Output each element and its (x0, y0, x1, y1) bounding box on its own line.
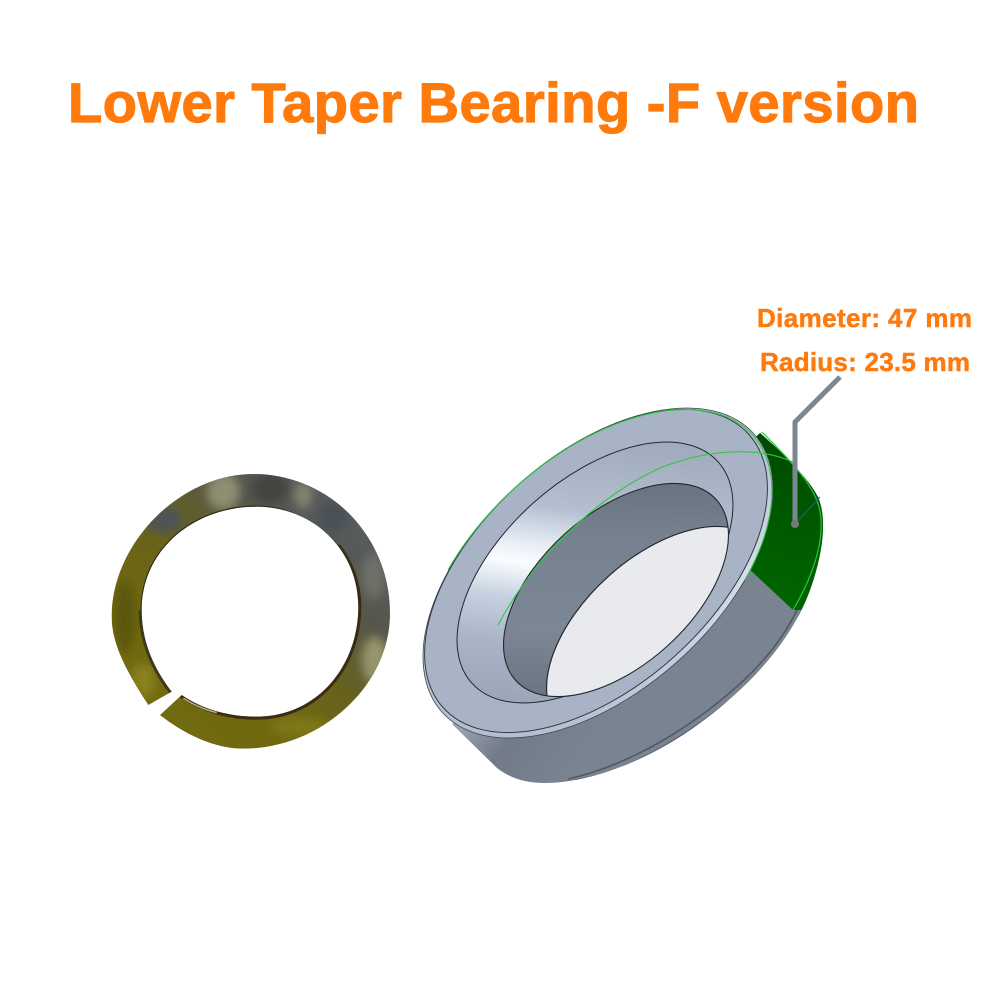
leader line with anchor dot (791, 377, 840, 528)
tapered inner surface (410, 393, 780, 752)
green face edge lines (762, 432, 821, 610)
rim top face (366, 348, 826, 794)
photo: split brass taper bearing ring (112, 474, 390, 749)
highlighted green face (750, 433, 824, 610)
bore wall (465, 443, 767, 737)
rim bevel (363, 345, 833, 801)
label: diameter: Diameter: 47 mm (757, 303, 972, 333)
bearing body side wall (452, 433, 823, 783)
label: radius: Radius: 23.5 mm (760, 347, 970, 377)
bore edge outline (465, 443, 767, 737)
lower flange edge (568, 575, 814, 780)
blue construction line (797, 497, 820, 522)
see-through opening (546, 526, 728, 696)
green rim edge arc (448, 410, 772, 580)
diagram: CAD model of lower taper bearing (422, 408, 824, 783)
green construction arc (498, 452, 793, 625)
title: Lower Taper Bearing -F version (68, 71, 919, 134)
